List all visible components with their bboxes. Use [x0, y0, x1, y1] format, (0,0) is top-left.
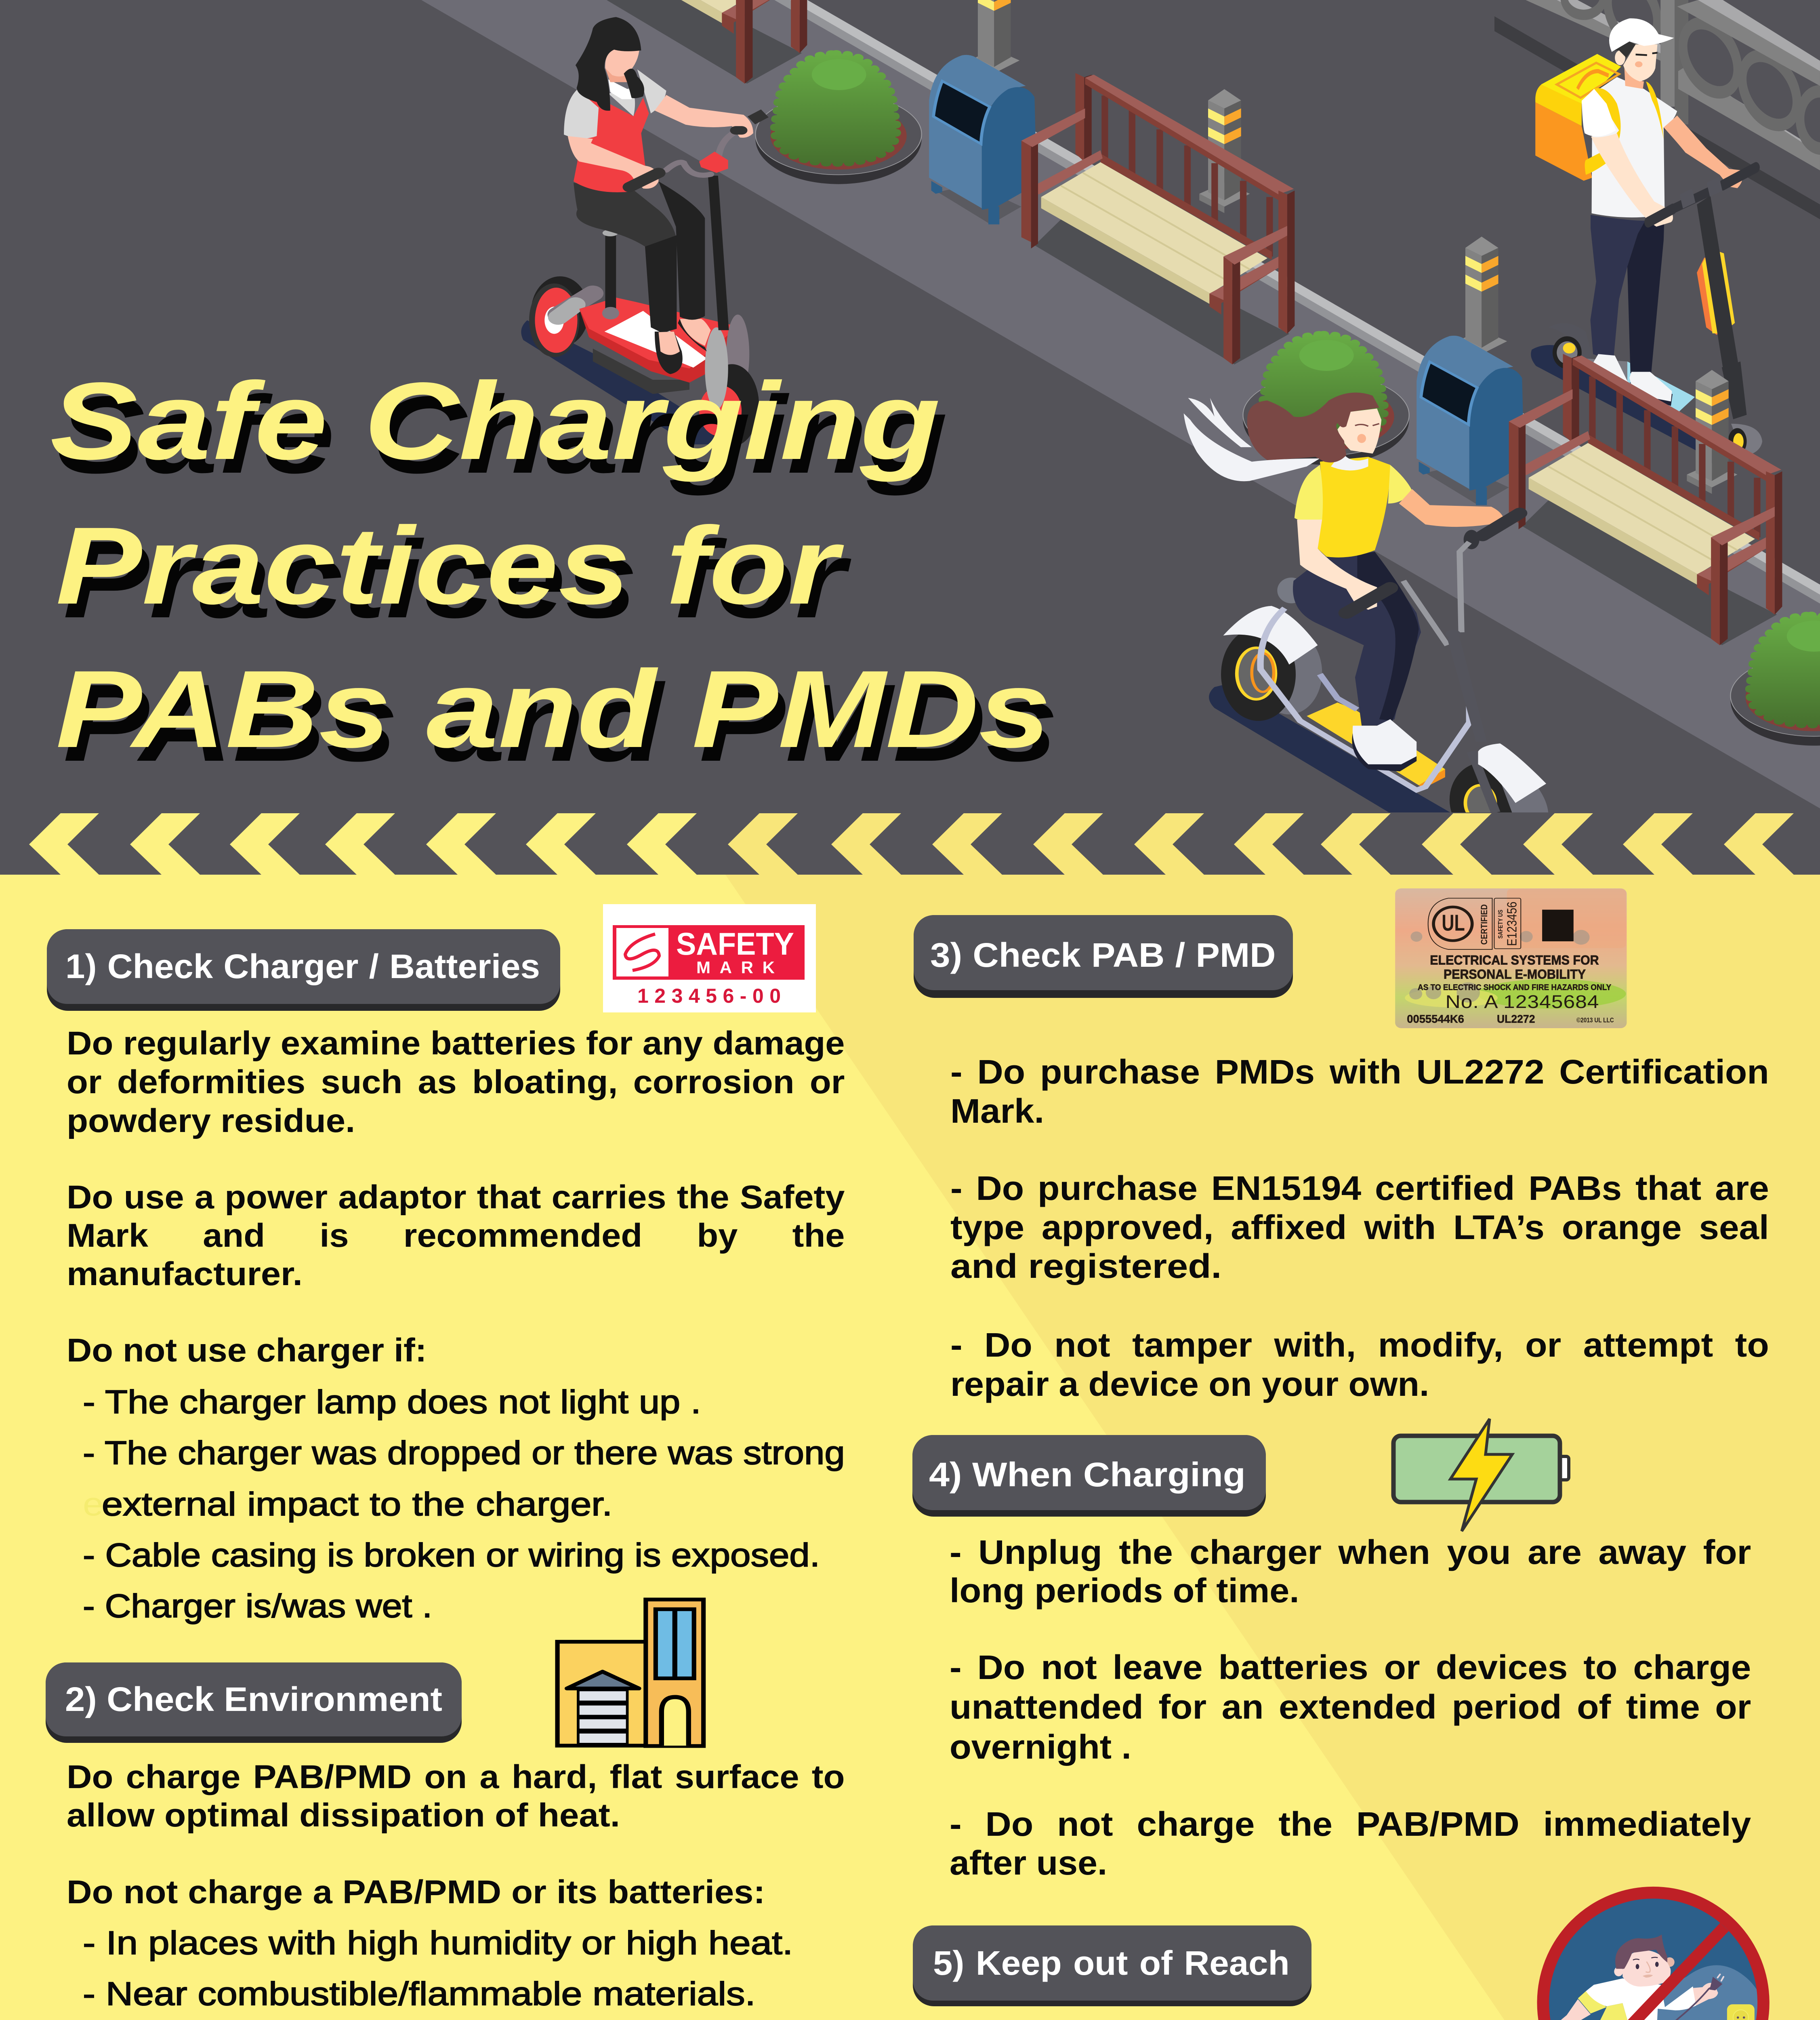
text: do not leave unattended: - Do not leave batteries or devices to charge	[950, 1648, 1751, 1686]
text: UL2272 certification: Mark.	[950, 1092, 1044, 1130]
icon: no children near socket sign	[1536, 1893, 1770, 2020]
text: examine batteries: Do regularly examine batteries for any damage	[67, 1025, 845, 1062]
icon: Safety Mark logo: SAFETY	[676, 926, 794, 962]
title: Safe Charging	[50, 360, 940, 483]
text: do not use charger list: - The charger was dropped or there was strong	[83, 1435, 845, 1471]
text: unplug charger: - Unplug the charger when you are away for	[950, 1533, 1751, 1571]
heading 1: check charger / batteries: 1) Check Charger / Batteries	[65, 947, 540, 985]
title: Practices for	[56, 504, 844, 627]
text: do not use charger list: - Charger is/was wet .	[83, 1588, 432, 1624]
text: do not tamper	[950, 1325, 1769, 1406]
icon: UL certification label: SAFETY US	[1497, 910, 1504, 938]
text: examine batteries: powdery residue.	[67, 1103, 355, 1139]
heading 3: check PAB / PMD: 3) Check PAB / PMD	[930, 936, 1276, 974]
text: examine batteries	[67, 1022, 845, 1143]
icon: UL certification label: No. A 12345684	[1446, 992, 1599, 1012]
icon: UL certification label: UL	[1442, 910, 1465, 935]
title: PABs and PMDs	[56, 648, 1051, 770]
heading 4: when charging: 4) When Charging	[929, 1456, 1246, 1494]
pavement band	[421, 0, 1820, 808]
text: EN15194 certified PABs	[950, 1168, 1769, 1288]
text: do not charge immediately: - Do not charge the PAB/PMD immediately	[950, 1805, 1751, 1843]
text: unplug charger	[950, 1532, 1751, 1611]
text: power adaptor: Mark and is recommended by the	[67, 1217, 845, 1254]
text: do not use charger list: Do not use charger if:	[67, 1332, 427, 1369]
icon: UL certification label	[1395, 888, 1627, 1028]
icon: Safety Mark logo: MARK	[696, 958, 775, 977]
text: UL2272 certification: - Do purchase PMDs with UL2272 Certification	[950, 1053, 1769, 1091]
icon: UL certification label: E123456	[1504, 902, 1519, 946]
text: do not leave unattended: overnight .	[950, 1728, 1131, 1766]
text: do not charge list: - Near combustible/flammable materials.	[83, 1976, 756, 2012]
icon: Safety Mark logo	[603, 904, 816, 1012]
text: do not use charger list	[67, 1331, 845, 1630]
rider 1: woman in red on stand-up scooter	[521, 17, 765, 446]
title: Practices for	[63, 518, 851, 641]
curb	[774, 0, 1820, 604]
text: examine batteries: or deformities such as bloating, corrosion or	[67, 1064, 845, 1100]
text: do not use charger list: e	[83, 1486, 103, 1523]
heading 3: check PAB / PMD	[914, 915, 1293, 998]
heading 1: check charger / batteries	[47, 929, 560, 1011]
yellow lower panel background	[0, 875, 1820, 2020]
text: do not tamper: repair a device on your own.	[950, 1365, 1429, 1403]
darker yellow diagonal	[725, 875, 1820, 2020]
text: do not use charger list: - Cable casing is broken or wiring is exposed.	[83, 1537, 820, 1574]
title	[50, 360, 1058, 784]
text: do not leave unattended: unattended for an extended period of time or	[950, 1688, 1751, 1726]
icon: Safety Mark logo: 123456-00	[637, 985, 781, 1007]
text: do not charge list: Do not charge a PAB/PMD or its batteries:	[67, 1874, 765, 1911]
icon: UL certification label: AS TO ELECTRIC SHOCK AND FIRE HAZARDS ONLY	[1418, 983, 1611, 992]
fence behind delivery rider	[1494, 0, 1820, 219]
heading 2: check environment: 2) Check Environment	[65, 1680, 442, 1718]
text: do not charge list: - In places with high humidity or high heat.	[83, 1925, 793, 1961]
icon: UL certification label: CERTIFIED	[1480, 904, 1489, 945]
rider 3: woman in yellow on e-scooter	[1184, 393, 1549, 837]
heading 5: keep out of reach	[913, 1925, 1311, 2006]
text: EN15194 certified PABs: and registered.	[950, 1247, 1221, 1285]
text: unplug charger: long periods of time.	[950, 1572, 1299, 1610]
icon: UL certification label: PERSONAL E-MOBILITY	[1444, 967, 1586, 982]
text: power adaptor: manufacturer.	[67, 1256, 303, 1292]
text: do not charge immediately	[950, 1804, 1751, 1883]
street furniture in front of delivery rider	[1243, 237, 1820, 926]
title: PABs and PMDs	[63, 661, 1058, 784]
text: UL2272 certification	[950, 1052, 1769, 1133]
heading 2: check environment	[46, 1662, 462, 1743]
icon: UL certification label: UL2272	[1497, 1013, 1535, 1025]
text: EN15194 certified PABs: - Do purchase EN15194 certified PABs that are	[950, 1169, 1769, 1207]
text: do not charge list	[67, 1873, 845, 2020]
title: Safe Charging	[57, 373, 948, 497]
chevron band	[29, 813, 1794, 875]
text: hard flat surface: allow optimal dissipation of heat.	[67, 1797, 620, 1834]
icon: UL certification label: 0055544K6	[1407, 1013, 1464, 1025]
icon: UL certification label: ©2013 UL LLC	[1576, 1016, 1614, 1024]
text: do not use charger list: external impact to the charger.	[102, 1486, 612, 1523]
text: do not leave unattended	[950, 1648, 1751, 1768]
text: EN15194 certified PABs: type approved, affixed with LTA’s orange seal	[950, 1208, 1769, 1246]
icon: UL certification label: ELECTRICAL SYSTEMS FOR	[1430, 953, 1599, 968]
text: do not tamper: - Do not tamper with, modify, or attempt to	[950, 1326, 1769, 1364]
heading 5: keep out of reach: 5) Keep out of Reach	[933, 1944, 1290, 1982]
street furniture: benches, planters, mailboxes, bollards	[268, 0, 1295, 364]
heading 4: when charging	[912, 1435, 1266, 1517]
text: do not charge immediately: after use.	[950, 1844, 1107, 1882]
text: power adaptor	[67, 1178, 845, 1295]
text: do not use charger list: - The charger lamp does not light up .	[83, 1384, 701, 1420]
icon: charging battery	[1393, 1419, 1569, 1531]
text: hard flat surface	[67, 1757, 845, 1838]
street illustration	[268, 0, 1820, 926]
icon: buildings	[557, 1599, 704, 1746]
rider 2: delivery man with yellow backpack on kick scooter	[1531, 18, 1762, 456]
dark street background	[0, 0, 1820, 875]
text: power adaptor: Do use a power adaptor that carries the Safety	[67, 1179, 845, 1216]
text: hard flat surface: Do charge PAB/PMD on a hard, flat surface to	[67, 1759, 845, 1795]
